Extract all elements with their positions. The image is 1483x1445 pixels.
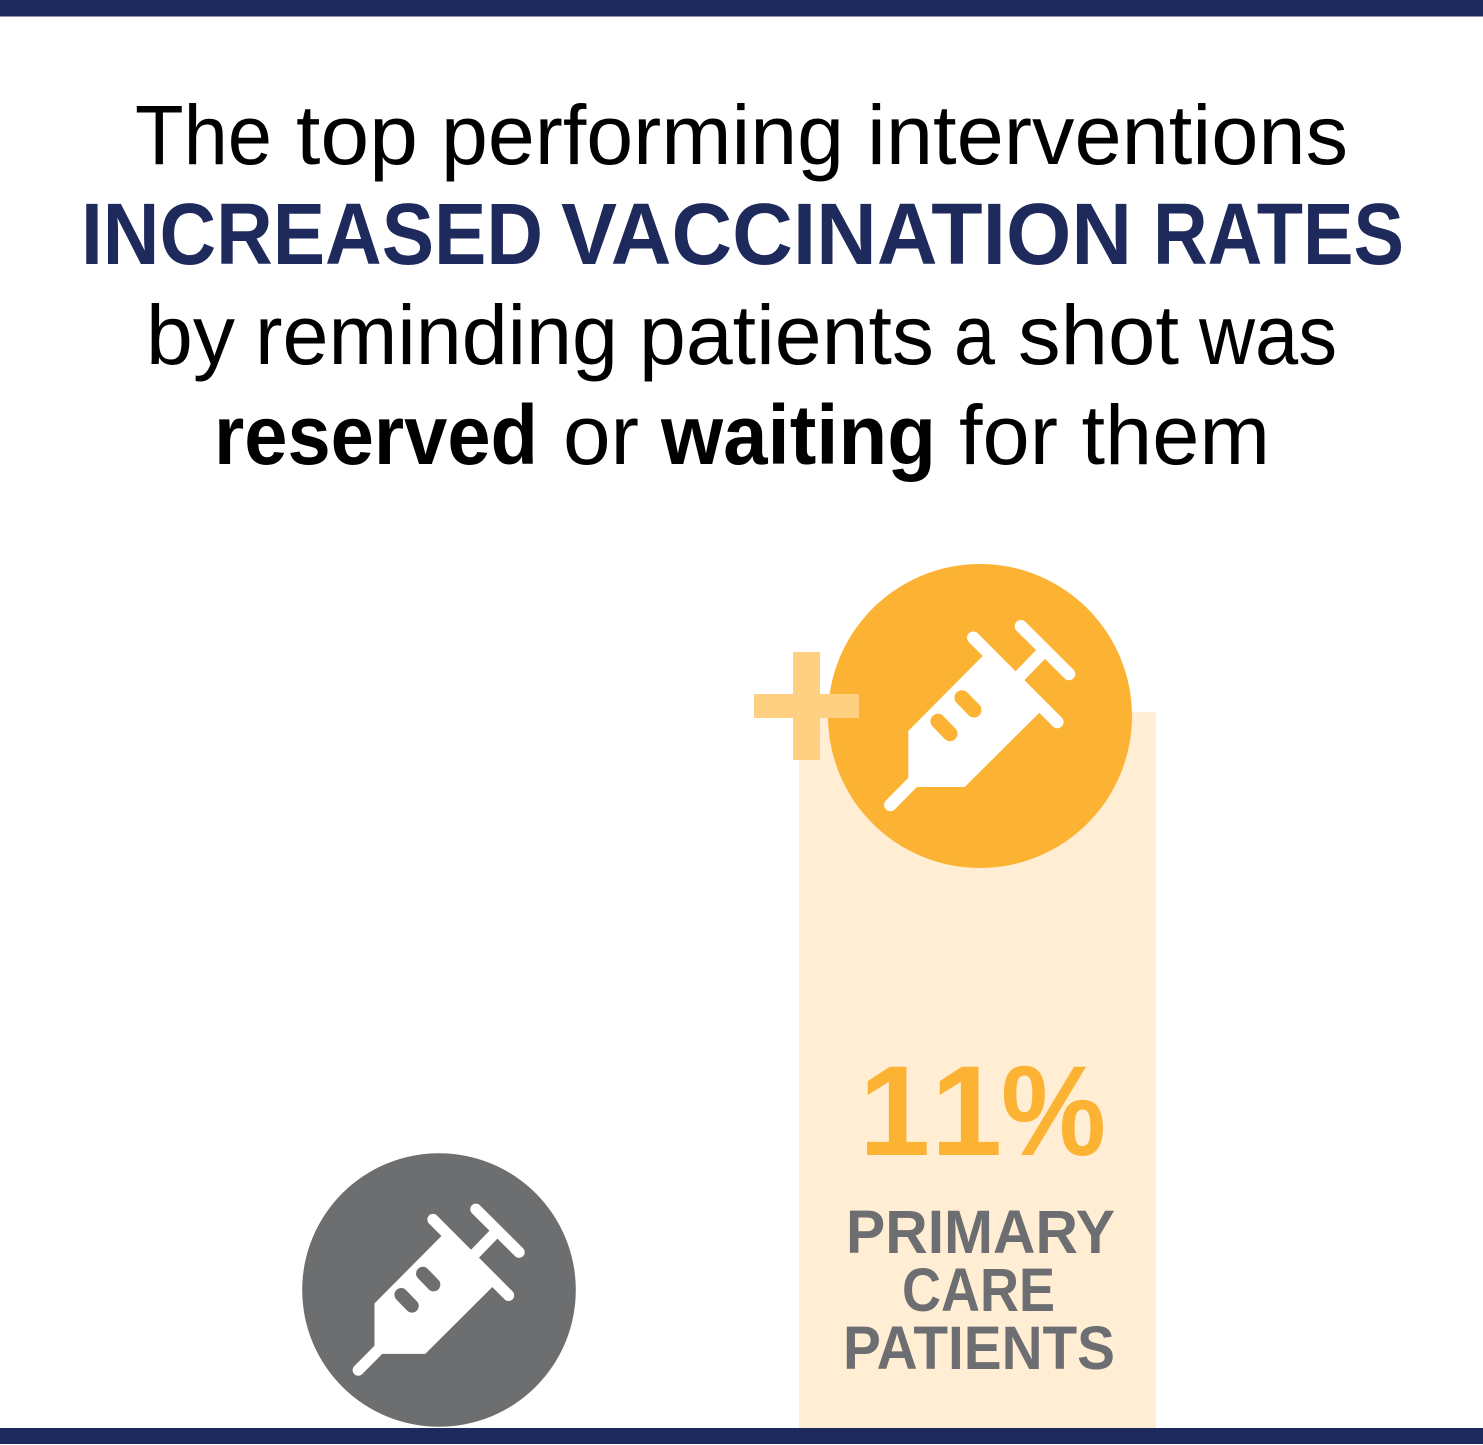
title line 4: reserved: [214, 388, 538, 482]
title line 4: or: [563, 388, 639, 482]
label line 1: PRIMARY: [846, 1198, 1115, 1266]
title line 1: The: [135, 88, 272, 182]
title line 2: emphasis: RATES: [1153, 186, 1404, 283]
bottom navy band: [0, 1428, 1483, 1444]
stat: 11%: 1: [931, 1040, 1002, 1183]
top navy band: [0, 0, 1483, 16]
title line 3: patients: [639, 288, 934, 382]
title line 4: [214, 388, 1270, 482]
label line 3: PATIENTS: [843, 1314, 1115, 1382]
title line 1: performing: [441, 88, 844, 182]
title line 3: by: [146, 288, 235, 382]
title line 1: interventions: [867, 88, 1348, 182]
tall pale orange bar: primary care patients: [799, 712, 1156, 1428]
title line 3: was: [1198, 288, 1337, 382]
stat: 11%: 1: [859, 1040, 930, 1183]
title line 2: emphasis: INCREASED: [81, 186, 543, 283]
icon: orange syringe badge: [828, 564, 1132, 868]
title line 3: reminding: [255, 288, 618, 382]
title line 4: waiting: [660, 388, 936, 482]
title line 3: a: [954, 288, 995, 382]
title line 4: for them: [959, 388, 1270, 482]
title line 1: top: [296, 88, 418, 182]
label line 2: CARE: [902, 1256, 1055, 1324]
icon: grey syringe badge: [302, 1153, 576, 1427]
label: primary care patients: [843, 1198, 1115, 1382]
title line 1: [135, 88, 1348, 182]
title line 3: shot: [1018, 288, 1179, 382]
title line 2: emphasis: VACCINATION: [561, 186, 1132, 283]
stat: 11%: [859, 1040, 1106, 1183]
title line 3: [146, 288, 1337, 382]
stat: 11%: %: [1001, 1040, 1106, 1183]
plus sign: [754, 652, 859, 760]
title: [81, 88, 1404, 482]
title line 2: emphasis: [81, 186, 1404, 283]
